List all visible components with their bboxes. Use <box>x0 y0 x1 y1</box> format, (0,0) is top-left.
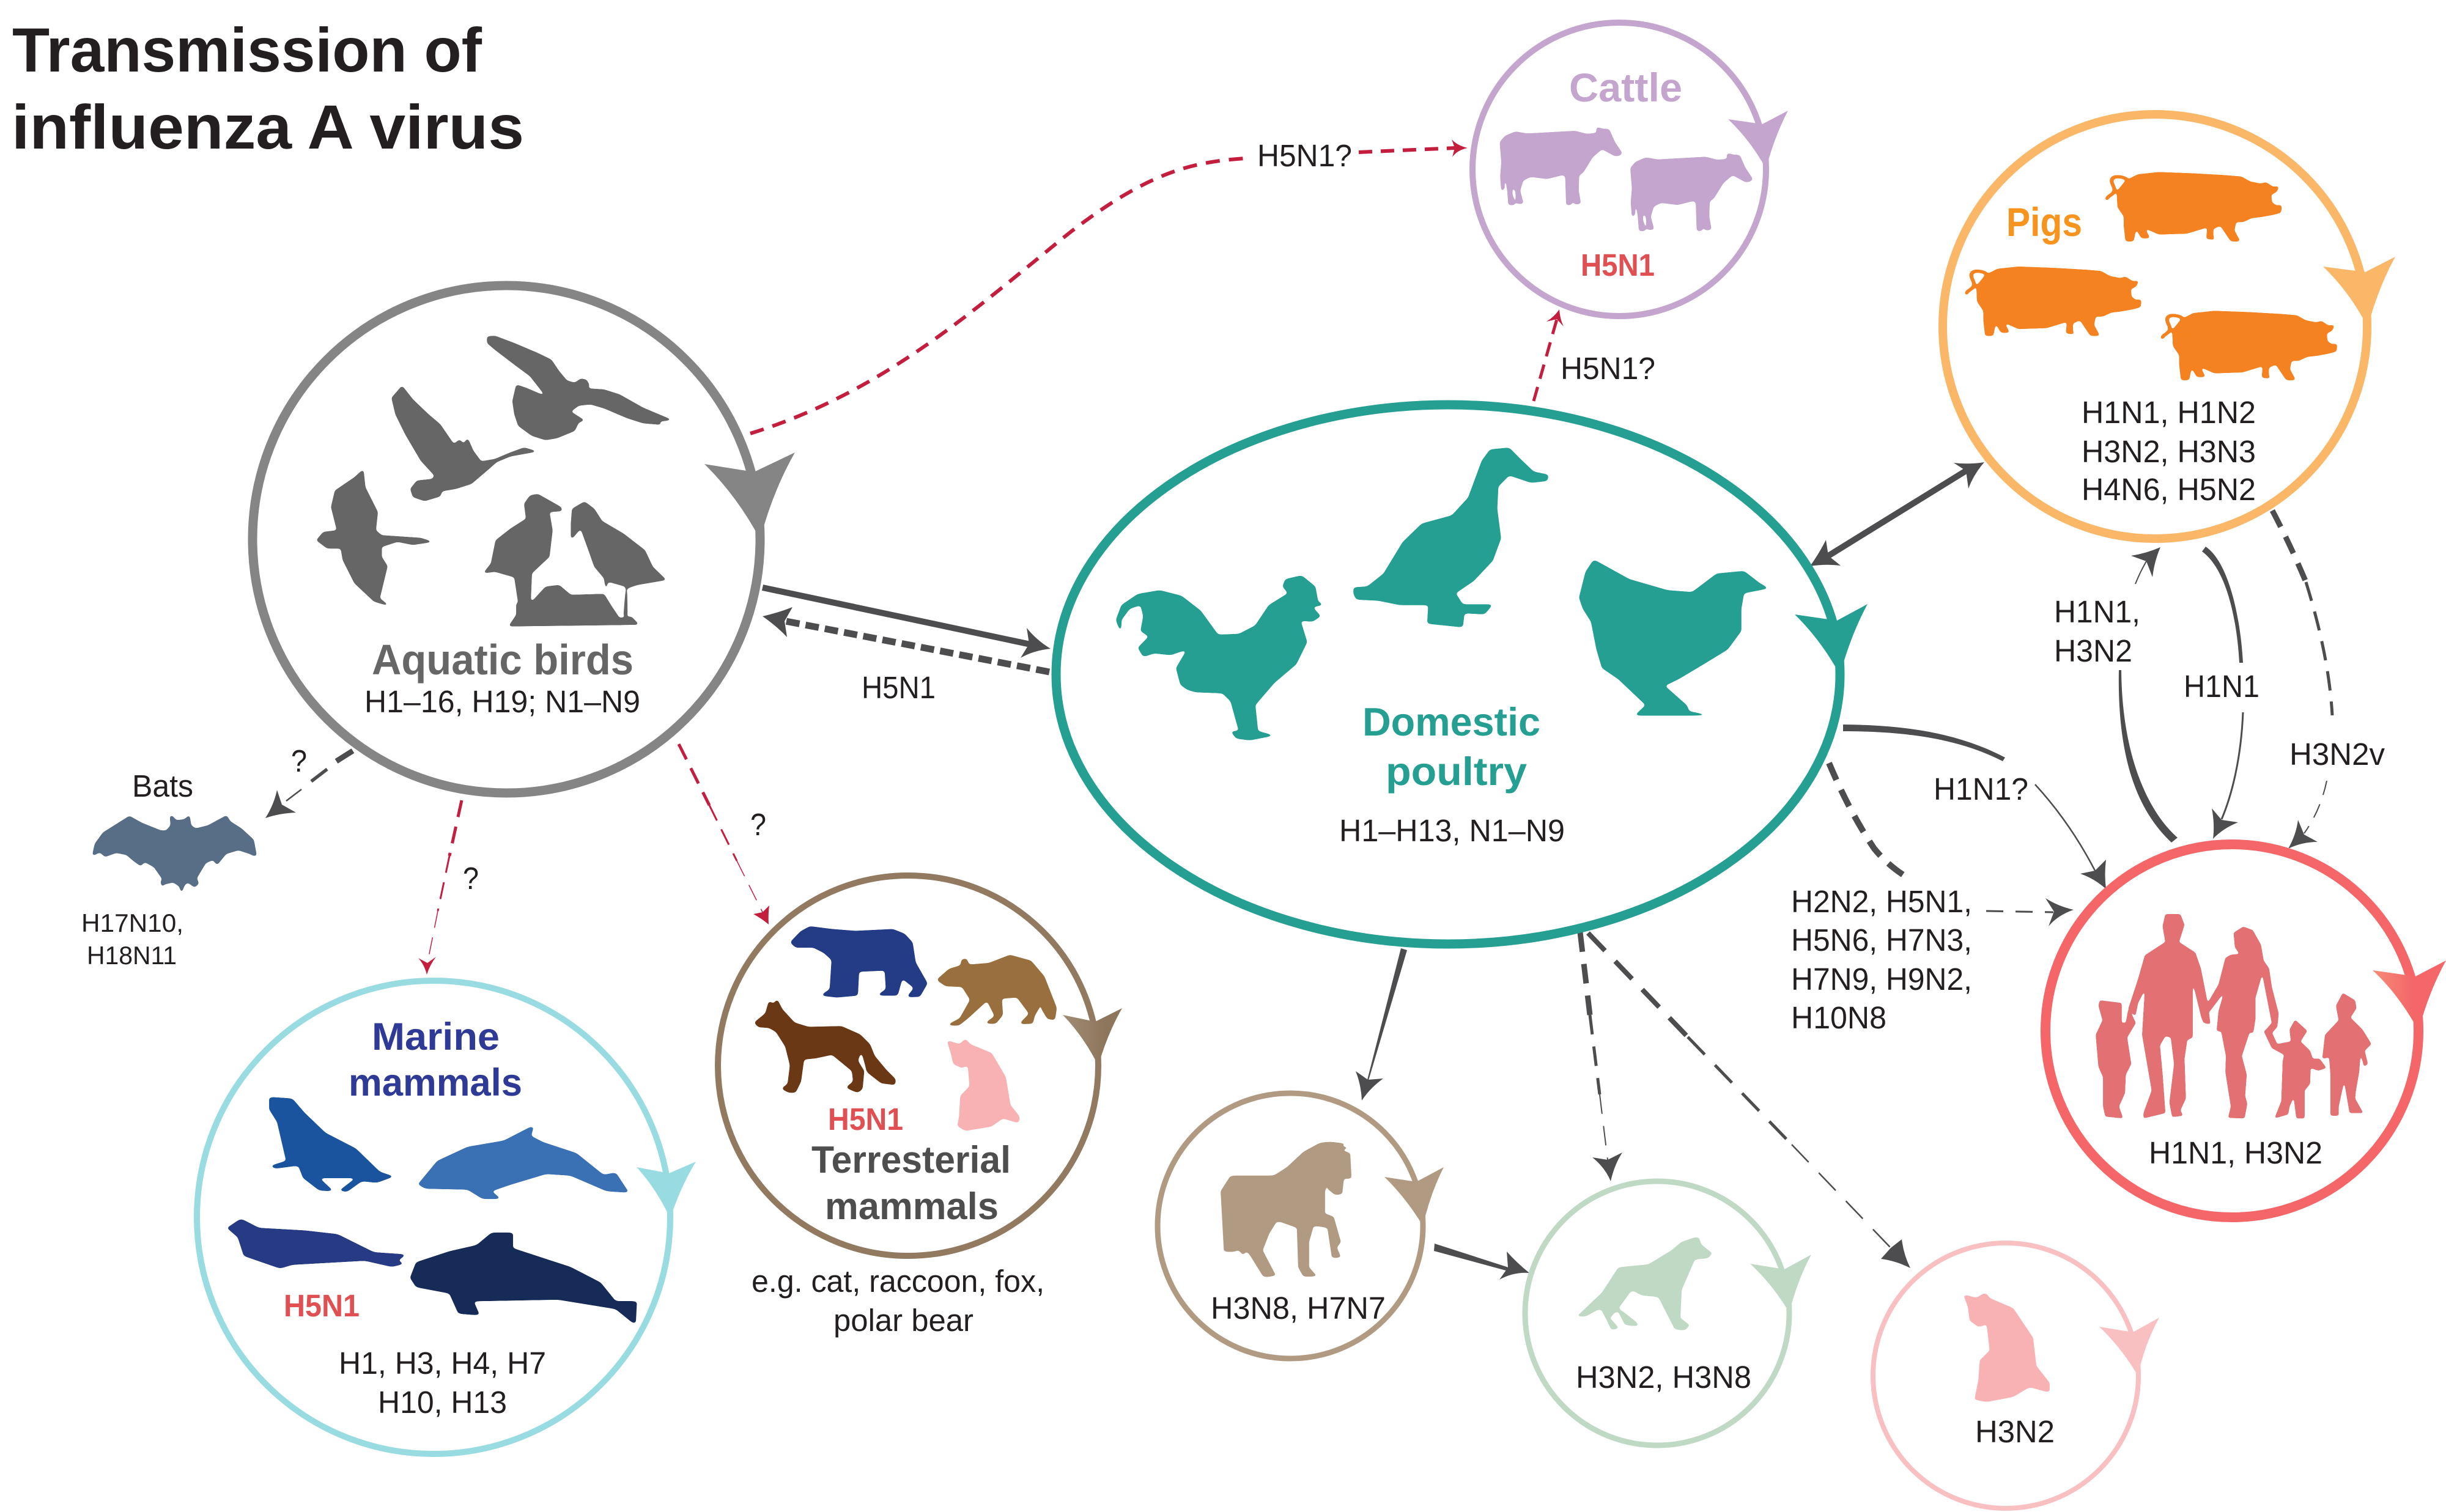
arrow: aquatic birds to bats: ? <box>291 743 307 778</box>
loop arrowhead: terrestrial mammals <box>1063 1008 1122 1066</box>
ring: cats <box>1873 1243 2138 1508</box>
arrow: aquatic birds to cattle (H5N1?): H5N1? <box>1257 138 1352 173</box>
subtype: marine mammals H5N1: H5N1 <box>284 1288 360 1323</box>
loop arrowhead: pigs <box>2323 257 2395 327</box>
arrow: horses to dogs <box>1434 1244 1529 1280</box>
subtypes: pigs: H4N6, H5N2 <box>2082 472 2256 507</box>
icon: sea lion, dolphin, seal and pilot whale <box>227 1097 637 1326</box>
arrow: poultry to humans (dashed, H2N2 and others): H10N8 <box>1791 1000 1886 1035</box>
subtypes: marine mammals: H10, H13 <box>378 1385 507 1420</box>
heading: domestic poultry <box>1362 699 1540 794</box>
heading: aquatic birds: Aquatic birds <box>372 636 634 684</box>
icon: bear, raccoon, fox and cat <box>754 926 1057 1130</box>
arrow: poultry to humans (dashed, H2N2 and others): H2N2, H5N1, <box>1791 884 1972 919</box>
panel: aquatic birds <box>253 286 795 793</box>
arrow: poultry to dogs <box>1580 932 1622 1181</box>
title: Transmission of <box>12 15 482 85</box>
heading: domestic poultry: poultry <box>1386 749 1527 794</box>
ring: terrestrial mammals <box>718 876 1098 1256</box>
panel: marine mammals <box>197 981 696 1454</box>
icon: dog <box>1577 1236 1712 1330</box>
loop arrowhead: aquatic birds <box>704 452 795 539</box>
subtypes: dogs: H3N2, H3N8 <box>1576 1360 1751 1395</box>
heading: marine mammals: Marine <box>372 1016 500 1058</box>
loop arrowhead: horses <box>1384 1167 1444 1226</box>
arrow: poultry to cats <box>1588 933 1910 1268</box>
ring: cattle <box>1472 23 1766 316</box>
loop arrowhead: domestic poultry <box>1795 604 1868 675</box>
panel: horses <box>1158 1093 1444 1359</box>
subtypes: pigs: H3N2, H3N3 <box>2082 434 2256 469</box>
examples: terrestrial mammals <box>752 1264 1044 1338</box>
subtypes: humans: H1N1, H3N2 <box>2149 1135 2322 1170</box>
arrow: humans to pigs (H1N1, H3N2) <box>2054 547 2178 843</box>
subtypes: bats: H18N11 <box>87 941 177 970</box>
arrow: aquatic birds to poultry <box>763 588 1051 658</box>
ring: dogs <box>1525 1181 1789 1445</box>
arrow: poultry to humans (dashed, H2N2 and others): H5N6, H7N3, <box>1791 923 1972 957</box>
arrow: aquatic birds to marine mammals: ? <box>463 861 479 896</box>
heading: marine mammals: mammals <box>349 1061 522 1104</box>
icon: three pigs <box>1967 172 2337 380</box>
panel: cats <box>1873 1243 2159 1508</box>
panel: terrestrial mammals <box>718 876 1122 1338</box>
heading: terrestrial mammals: Terresterial <box>811 1139 1011 1181</box>
subtypes: pigs <box>2082 395 2256 507</box>
subtypes: cats: H3N2 <box>1975 1414 2055 1449</box>
panel: cattle <box>1472 23 1788 316</box>
arrow: pigs to humans (H3N2v): H3N2v <box>2289 737 2385 772</box>
subtypes: aquatic birds: H1–16, H19; N1–N9 <box>364 684 640 719</box>
icon: bat <box>92 815 257 894</box>
ring: pigs <box>1943 114 2367 539</box>
arrow: humans to pigs (H1N1, H3N2): H3N2 <box>2054 633 2132 668</box>
arrow: poultry to aquatic birds (H5N1): H5N1 <box>862 670 936 705</box>
subtypes: bats: H17N10, <box>81 909 183 937</box>
icon: horse <box>1221 1142 1351 1277</box>
heading: terrestrial mammals <box>811 1139 1011 1228</box>
heading: bats: Bats <box>132 769 193 803</box>
ring: marine mammals <box>197 981 670 1454</box>
arrow: poultry to cattle (H5N1?) <box>1534 309 1655 401</box>
subtypes: pigs: H1N1, H1N2 <box>2082 395 2256 430</box>
subtypes: bats <box>81 909 183 970</box>
arrow: aquatic birds to cattle (H5N1?) <box>750 138 1468 433</box>
panel: humans <box>2045 844 2446 1217</box>
heading: terrestrial mammals: mammals <box>825 1186 999 1228</box>
arrow: aquatic birds to marine mammals <box>418 800 479 975</box>
loop arrowhead: cats <box>2099 1318 2159 1376</box>
heading: pigs: Pigs <box>2006 199 2082 245</box>
icon: family silhouettes <box>2096 914 2371 1118</box>
arrow: aquatic birds to terrestrial mammals: ? <box>750 807 766 842</box>
heading: cattle: Cattle <box>1569 65 1682 110</box>
icon: two cows <box>1500 127 1753 231</box>
title <box>12 15 524 162</box>
subtypes: domestic poultry: H1–H13, N1–N9 <box>1339 813 1565 848</box>
loop arrowhead: dogs <box>1750 1255 1811 1313</box>
ring: aquatic birds <box>253 286 760 793</box>
panel: bats <box>81 769 257 970</box>
heading: domestic poultry: Domestic <box>1362 699 1540 744</box>
arrow: humans to pigs (H1N1, H3N2): H1N1, <box>2054 594 2140 629</box>
ring: domestic poultry <box>1056 405 1840 944</box>
panel: pigs <box>1943 114 2395 539</box>
subtype: cattle: H5N1 <box>1581 248 1655 282</box>
arrow: pigs to humans (H1N1) <box>2184 547 2259 839</box>
arrow: poultry to cattle (H5N1?): H5N1? <box>1561 351 1655 386</box>
panel: dogs <box>1525 1181 1811 1445</box>
arrow: poultry to humans (H1N1?) <box>1843 725 2106 889</box>
ring: horses <box>1158 1093 1423 1359</box>
arrow: aquatic birds to terrestrial mammals <box>679 744 769 924</box>
title: influenza A virus <box>12 92 524 162</box>
arrow: poultry and pigs two-way <box>1810 462 1984 566</box>
loop arrowhead: marine mammals <box>637 1162 696 1219</box>
arrow: poultry to aquatic birds (H5N1) <box>763 607 1049 705</box>
heading: marine mammals <box>349 1016 522 1104</box>
subtype: terrestrial mammals H5N1: H5N1 <box>828 1102 903 1137</box>
icon: rooster, duck and hen <box>1116 448 1768 740</box>
loop arrowhead: cattle <box>1728 111 1788 169</box>
examples: terrestrial mammals: e.g. cat, raccoon, fox, <box>752 1264 1044 1299</box>
arrow: poultry to horses <box>1356 948 1407 1101</box>
arrow: poultry to humans (dashed, H2N2 and others): H7N9, H9N2, <box>1791 962 1972 997</box>
icon: cat <box>1964 1292 2050 1402</box>
arrow: pigs to humans (H1N1): H1N1 <box>2184 669 2259 704</box>
arrow: poultry to humans (H1N1?): H1N1? <box>1934 772 2028 806</box>
arrow: pigs to humans (H3N2v) <box>2272 511 2385 849</box>
examples: terrestrial mammals: polar bear <box>833 1303 974 1338</box>
arrow: poultry to humans (dashed, H2N2 and others) <box>1791 763 2074 1035</box>
panel: domestic poultry <box>1056 405 1868 944</box>
icon: aquatic birds silhouettes <box>316 336 672 627</box>
ring: humans <box>2045 844 2418 1217</box>
subtypes: marine mammals <box>339 1346 546 1420</box>
loop arrowhead: humans <box>2373 961 2446 1031</box>
subtypes: horses: H3N8, H7N7 <box>1211 1291 1386 1326</box>
arrow: aquatic birds to bats <box>265 743 353 818</box>
subtypes: marine mammals: H1, H3, H4, H7 <box>339 1346 546 1381</box>
